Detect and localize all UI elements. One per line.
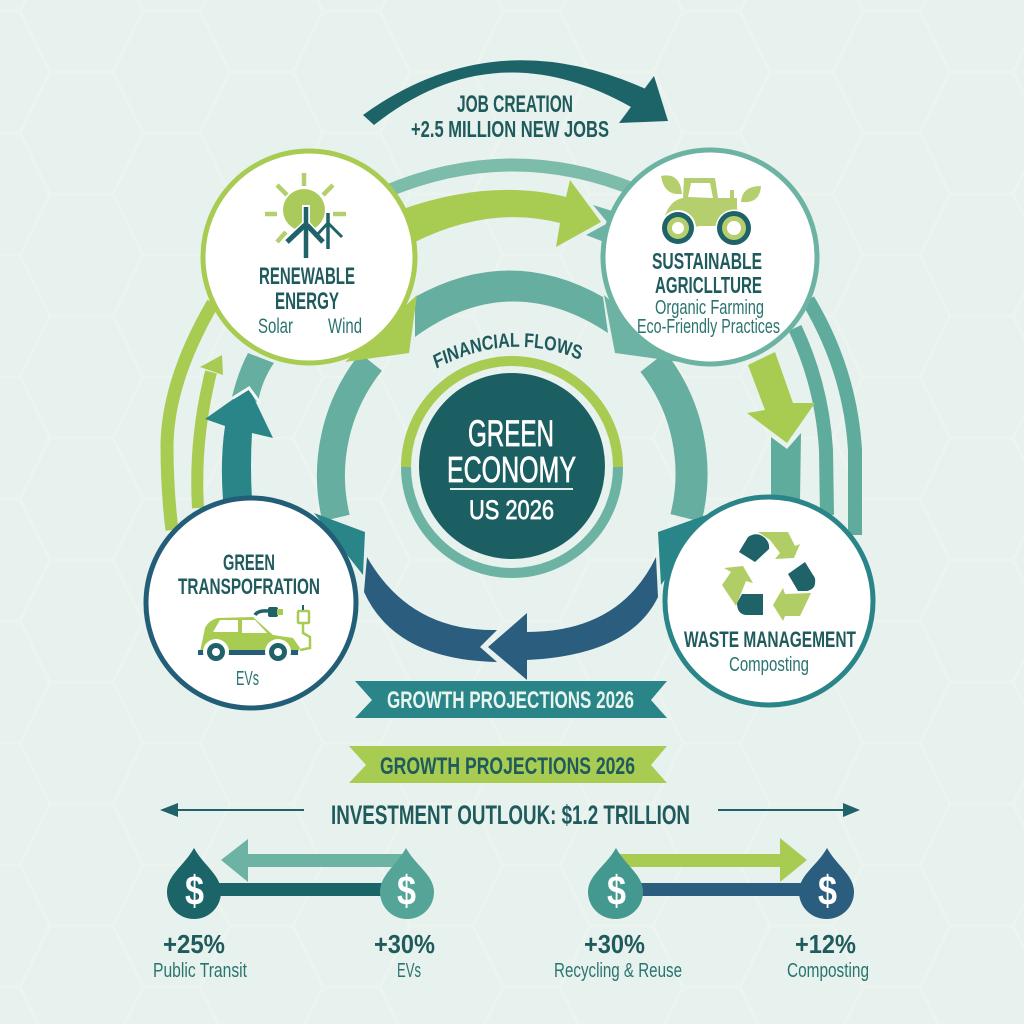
- stat: +25% public transit: [153, 929, 247, 982]
- arrow: left: [160, 803, 304, 817]
- stat: +12% composting: +12%: [795, 929, 856, 959]
- arrow: small lime up: [197, 355, 223, 508]
- hub title: GREEN: [468, 413, 554, 454]
- arrow: lime renewable to agriculture: [400, 180, 601, 247]
- label: energy: ENERGY: [275, 288, 339, 315]
- arc: top thin teal: [385, 165, 640, 192]
- drop: EVs: [380, 848, 434, 919]
- label: composting: Composting: [729, 654, 809, 676]
- arcs: thin teal right: [795, 300, 855, 535]
- center hub: green economy: [406, 361, 618, 573]
- investment outlook heading: [160, 800, 860, 830]
- arrow: teal up to renewable: [205, 388, 273, 500]
- connector bar: [194, 883, 406, 896]
- circle: waste management: [658, 497, 873, 705]
- ring: teal bottom: [406, 467, 618, 573]
- flow: recycling to composting: [554, 838, 869, 982]
- arrow: navy bottom right: [488, 557, 658, 680]
- label: sustainable agriculture: SUSTAINABLE: [652, 248, 762, 274]
- arc: outer lime left: [167, 303, 213, 530]
- label: solar: Solar: [258, 315, 293, 338]
- arrow: small teal behind agriculture: [586, 205, 625, 250]
- ring: lime top: [406, 361, 618, 467]
- label: transportation: TRANSPOFRATION: [178, 574, 320, 599]
- stat: +30% recycling: +30%: [584, 929, 645, 959]
- icon: tractor with leaves: [660, 175, 761, 246]
- icon: electric car and charger: [198, 605, 310, 665]
- stat: +30% recycling: Recycling & Reuse: [554, 960, 682, 982]
- stat: +30% EVs: +30%: [374, 929, 435, 959]
- flow: public transit to EVs: [153, 839, 435, 982]
- banner: lime growth projections: [349, 746, 667, 783]
- label: green: GREEN: [223, 550, 275, 575]
- icon: sun and wind turbines: [265, 173, 346, 258]
- investment text: INVESTMENT OUTLOUK: $1.2 TRILLION: [331, 800, 690, 830]
- hub title second line: ECONOMY: [447, 449, 576, 490]
- circle: sustainable agriculture: [603, 150, 817, 364]
- hub disc: [419, 373, 605, 559]
- arc: teal into waste: [771, 433, 801, 500]
- arrow: lime pointing right: [612, 838, 807, 882]
- stat: +30% EVs: EVs: [397, 960, 421, 982]
- job creation text: +2.5 MILLION NEW JOBS: [411, 116, 609, 142]
- arrow: light teal pointing left: [221, 839, 410, 882]
- label: wind: Wind: [328, 315, 362, 338]
- label: renewable energy: RENEWABLE: [259, 263, 355, 290]
- arc: inner ring top: [415, 270, 608, 337]
- arrow: right: [718, 803, 860, 817]
- stat: +30% EVs: [374, 929, 435, 982]
- job creation text: JOB CREATION: [457, 91, 573, 118]
- heading: financial flows: FINANCIAL FLOWS: [432, 333, 582, 368]
- label: organic farming: Organic Farming: [655, 297, 764, 319]
- drop: recycling: $: [607, 867, 626, 914]
- job creation text: [411, 91, 609, 142]
- label: eco-friendly practices: Eco-Friendly Practices: [637, 316, 780, 338]
- icon: recycling symbol: [722, 532, 815, 621]
- label: EVs: EVs: [236, 668, 259, 690]
- job creation arrow: [363, 60, 668, 125]
- hub subtitle: US 2026: [469, 495, 554, 525]
- drop: composting: [799, 848, 854, 919]
- label: waste management: WASTE MANAGEMENT: [684, 627, 856, 652]
- stat: +25% public transit: Public Transit: [153, 960, 247, 982]
- stat: +12% composting: [787, 929, 869, 982]
- drop: public transit: $: [185, 867, 204, 914]
- arc: inner ring right: [653, 362, 692, 518]
- drop: public transit: [167, 848, 221, 919]
- connector bar: [616, 883, 827, 896]
- stat: +25% public transit: +25%: [163, 929, 225, 959]
- hub rule: [450, 488, 573, 490]
- arrow: lime down to waste: [747, 352, 815, 443]
- drop: recycling: [588, 848, 643, 919]
- label: agriculture line: AGRICLLTURE: [655, 272, 762, 298]
- arc: navy bottom left: [364, 557, 497, 662]
- banner: teal growth projections: [355, 681, 667, 718]
- financial flow arcs: [167, 165, 855, 680]
- banner: lime growth projections: GROWTH PROJECTIONS 2026: [380, 753, 635, 780]
- circle: green transportation: [146, 498, 365, 708]
- arc: inner ring left: [331, 362, 371, 518]
- drop: composting: $: [818, 867, 837, 914]
- circle: renewable energy: [203, 151, 417, 363]
- banner: teal growth projections: GROWTH PROJECTIONS 2026: [387, 687, 634, 714]
- arc: teal upper left: [232, 353, 274, 402]
- drop: EVs: $: [397, 867, 416, 914]
- stat: +30% recycling: [554, 929, 682, 982]
- stat: +12% composting: Composting: [787, 960, 869, 982]
